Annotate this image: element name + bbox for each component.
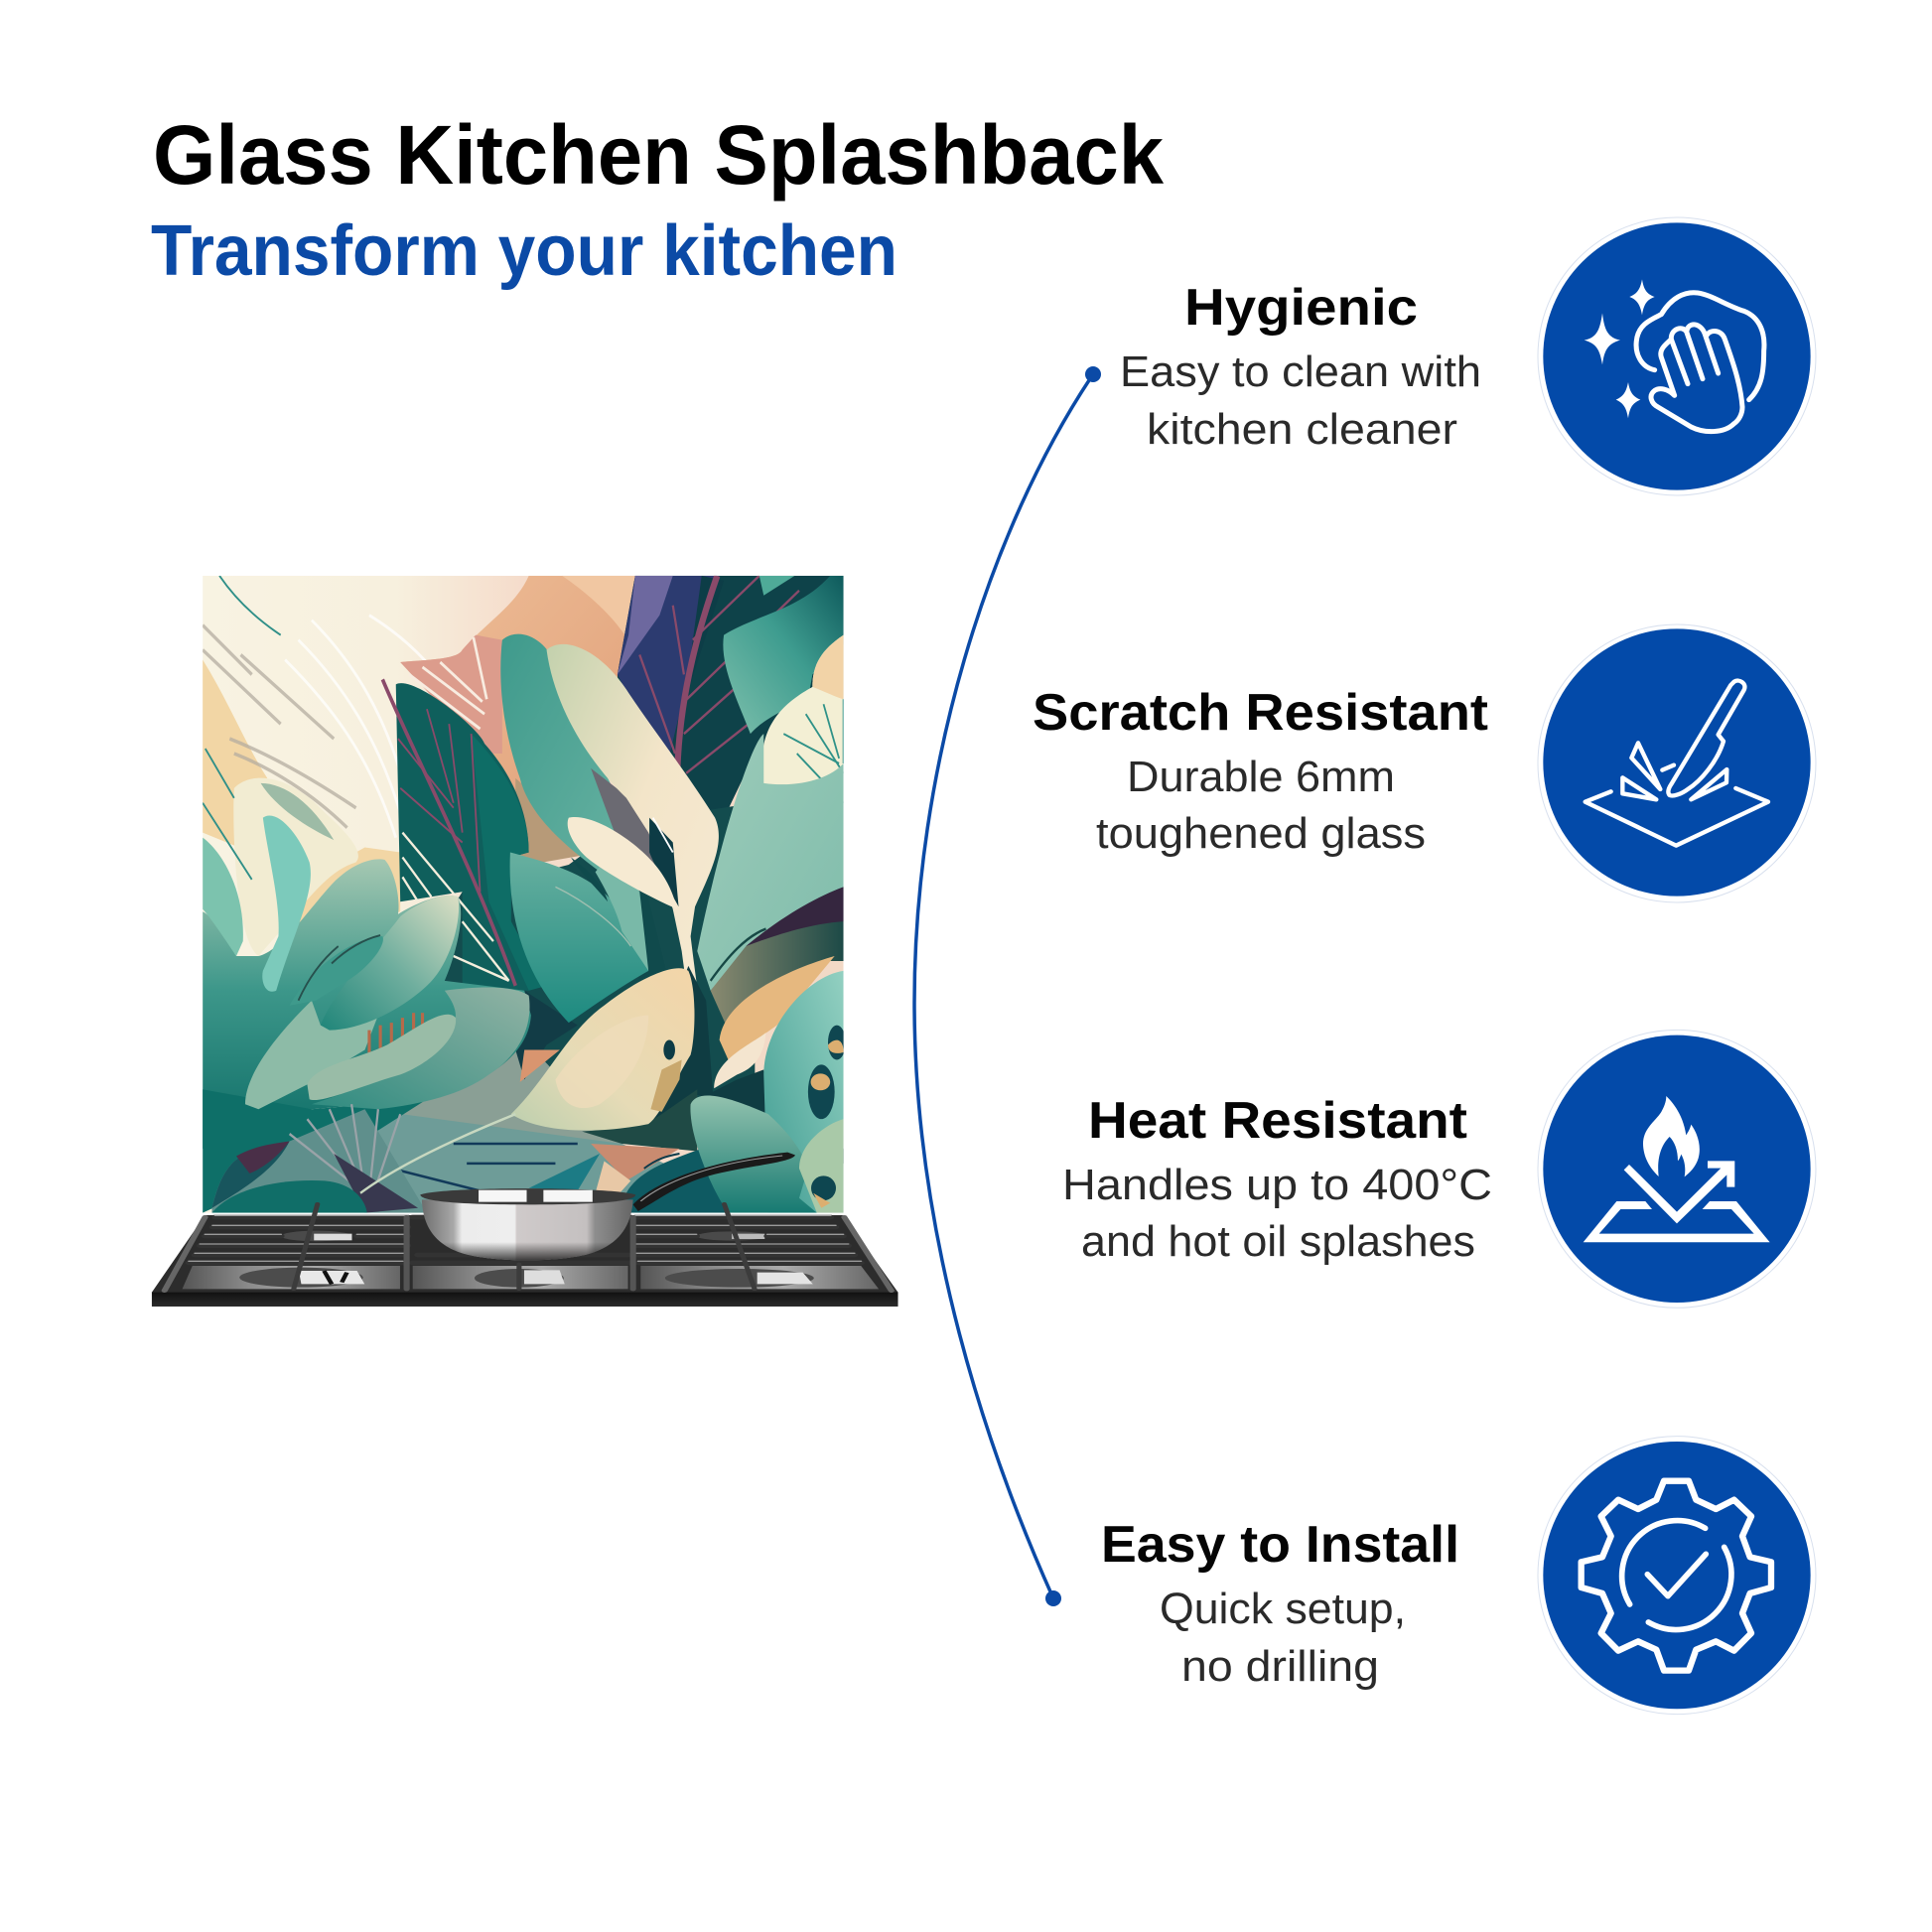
small cream sprout (714, 1033, 765, 1088)
feature: heat resistant (1062, 1092, 1492, 1266)
feature: scratch resistant (1033, 684, 1488, 858)
burners (239, 1231, 814, 1288)
feature: easy to install: Quick setup, (1160, 1585, 1406, 1633)
feature: hygienic: Hygienic (1184, 279, 1418, 337)
bottom cream leaf (511, 968, 694, 1131)
left foreground base (203, 859, 531, 1149)
feature: heat resistant: Handles up to 400°C (1062, 1161, 1492, 1209)
feature: easy to install (1101, 1516, 1459, 1691)
feature: heat resistant: Heat Resistant (1088, 1092, 1467, 1150)
pale oval leaf (799, 1119, 844, 1213)
center teal leaf (510, 852, 649, 1023)
feature: hygienic: Easy to clean with (1120, 347, 1481, 396)
burner trays (183, 1266, 879, 1289)
icon: hand wiping with sparkles (1538, 217, 1816, 495)
large cream leaf (546, 643, 719, 982)
right monstera leaf (763, 971, 846, 1213)
feature: scratch resistant: toughened glass (1096, 809, 1426, 858)
subtitle: Transform your kitchen (151, 211, 897, 291)
bottom left dark leaf and fronds (211, 1104, 515, 1213)
rear salmon and peach leaves (400, 576, 639, 791)
grey-green leaf (312, 988, 529, 1109)
feature: scratch resistant: Scratch Resistant (1033, 684, 1488, 742)
salmon stripes (369, 1013, 423, 1054)
center tongue leaf (262, 815, 311, 992)
dark slit (649, 818, 679, 906)
pan handle (633, 1153, 795, 1211)
tan patch beside dark leaf (515, 778, 580, 862)
feature: hygienic (1120, 279, 1481, 454)
connector curve (914, 366, 1101, 1606)
top right teal leaf (723, 576, 844, 734)
title: Glass Kitchen Splashback (153, 108, 1164, 202)
grates (165, 1204, 892, 1291)
splashback illustration (203, 576, 846, 1213)
feature: easy to install: no drilling (1181, 1642, 1379, 1691)
rear dark leaf (618, 576, 844, 828)
center underlay (445, 806, 755, 1098)
dark teal veined leaf (382, 679, 547, 991)
feature: hygienic: kitchen cleaner (1147, 405, 1457, 454)
upper foreground leaf (321, 896, 459, 1031)
small cream leaf (568, 817, 677, 909)
feature: easy to install: Easy to Install (1101, 1516, 1459, 1574)
dark under bottom cream leaf (654, 966, 764, 1118)
center dark (516, 991, 578, 1080)
purple grey slit behind cream leaf (591, 768, 655, 865)
icon: knife scratching glass (1538, 624, 1816, 902)
gas hob with pan (152, 1153, 897, 1307)
lower teal leaf (690, 1096, 817, 1213)
left top leaf (203, 838, 243, 956)
hob body (152, 1215, 897, 1307)
feature: heat resistant: and hot oil splashes (1081, 1217, 1475, 1266)
icon: flame on heat resistant surface (1538, 1030, 1816, 1308)
feature: scratch resistant: Durable 6mm (1127, 753, 1395, 801)
tall teal leaf (500, 633, 614, 870)
right cream circle (762, 635, 844, 803)
bottom panel palm and shapes (364, 1109, 729, 1213)
left foreground mid leaf (245, 1001, 377, 1110)
icon: gear with check mark (1538, 1437, 1816, 1715)
right dark and tan layers (711, 887, 844, 1059)
pale tongue leaf (307, 1015, 456, 1100)
pan body (420, 1188, 635, 1260)
right pale green leaf (697, 734, 844, 991)
